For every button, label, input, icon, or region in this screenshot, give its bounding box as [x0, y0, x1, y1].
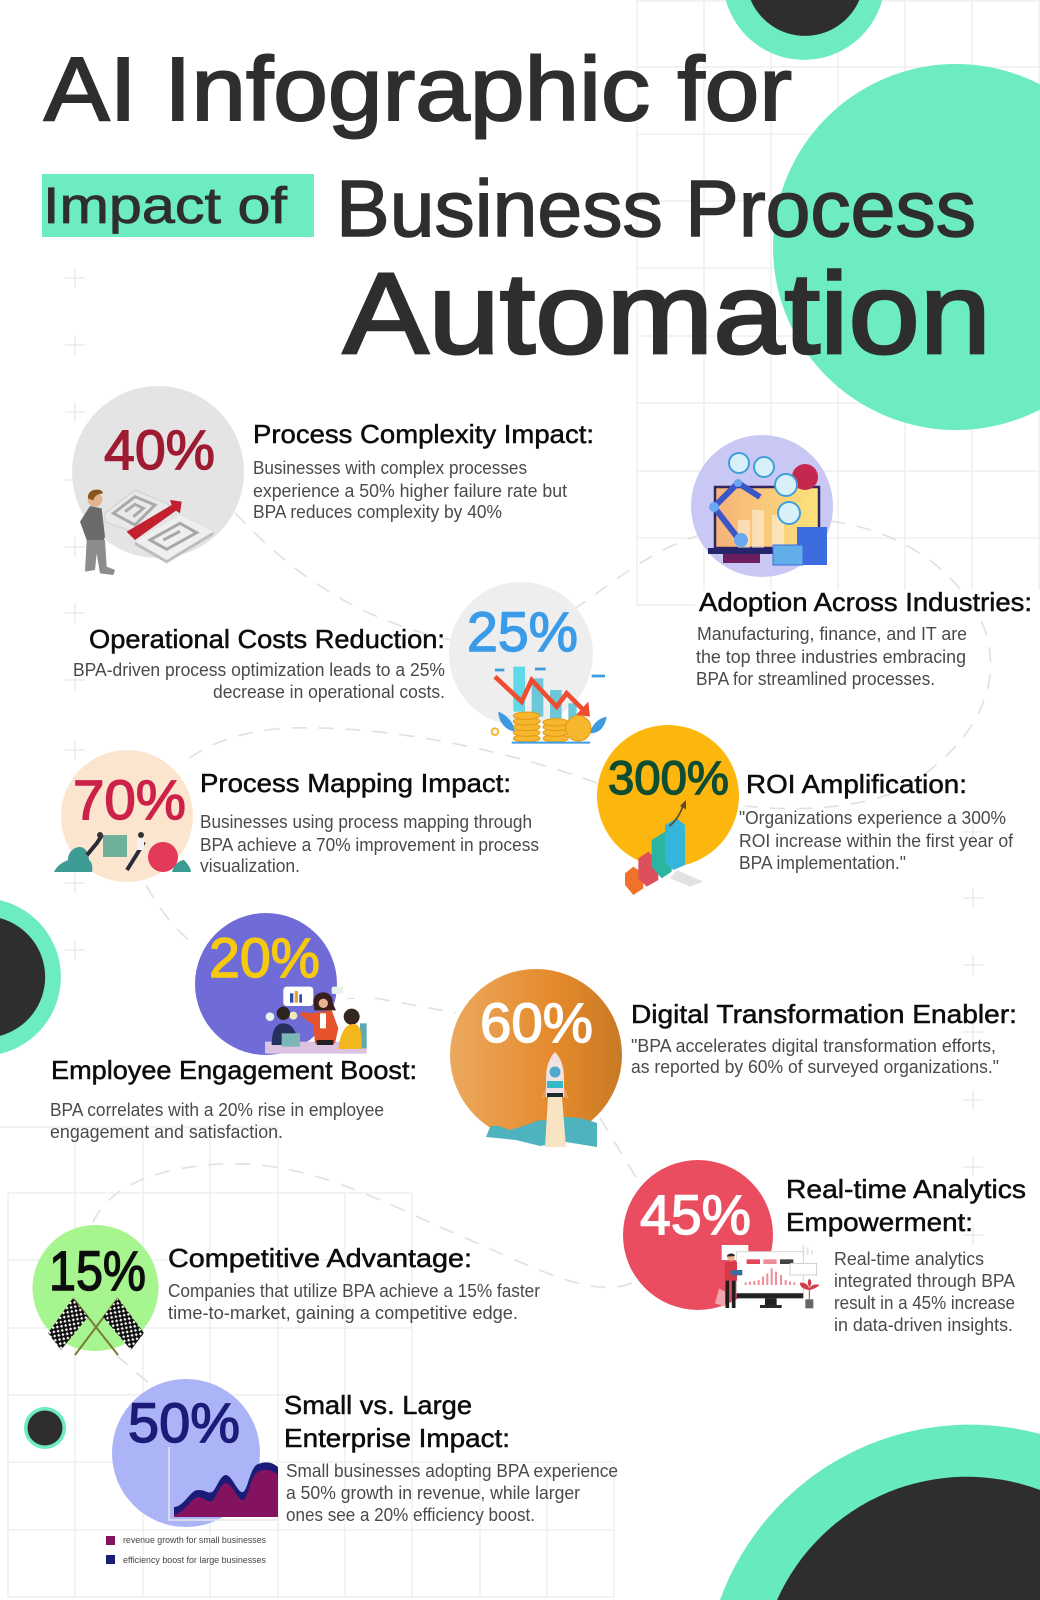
- body text: BPA correlates with a 20% rise in employee: [50, 1100, 384, 1120]
- body text: [631, 1036, 999, 1077]
- legend: revenue growth for small businesses: [123, 1535, 266, 1546]
- icon: crossed checkered flags: [48, 1298, 144, 1355]
- body text: [253, 458, 567, 522]
- body text: BPA achieve a 70% improvement in process: [200, 835, 539, 855]
- stat value 20%: 20%: [209, 926, 320, 989]
- heading: [786, 1174, 1026, 1237]
- body text: "BPA accelerates digital transformation efforts,: [631, 1036, 996, 1056]
- heading: Process Mapping Impact:: [200, 768, 511, 798]
- icon: falling cost chart with coins: [492, 667, 607, 743]
- panel: operational costs 25%: [73, 582, 607, 743]
- body text: engagement and satisfaction.: [50, 1122, 283, 1142]
- panel: adoption across industries: [691, 435, 1032, 689]
- body text: [73, 660, 445, 702]
- body text: BPA-driven process optimization leads to a 25%: [73, 660, 445, 680]
- title line: AI Infographic for: AI Infographic for: [44, 40, 792, 140]
- panel: competitive advantage 15%: [32, 1225, 540, 1355]
- legend: efficiency boost for large businesses: [123, 1555, 266, 1566]
- body text: ones see a 20% efficiency boost.: [286, 1505, 535, 1525]
- body text: [286, 1461, 618, 1525]
- highlight: Impact of: Impact of: [43, 177, 288, 234]
- icon: man looking at maze: [80, 490, 213, 575]
- panel: digital transformation 60%: [450, 969, 1017, 1147]
- body text: Businesses with complex processes: [253, 458, 527, 478]
- stat circle 15%: [32, 1225, 158, 1351]
- body text: integrated through BPA: [834, 1271, 1015, 1291]
- heading: Enterprise Impact:: [284, 1423, 510, 1453]
- stat value 45%: 45%: [640, 1183, 751, 1246]
- connector: dashed path: [92, 513, 991, 1386]
- body text: Businesses using process mapping through: [200, 812, 532, 832]
- heading: Digital Transformation Enabler:: [631, 999, 1017, 1029]
- decoration: large teal circle: [773, 64, 1040, 430]
- decoration: left teal and dark circle: [0, 900, 61, 1054]
- heading: Competitive Advantage:: [168, 1243, 472, 1273]
- legend: [106, 1535, 266, 1566]
- stat circle 70%: [61, 750, 193, 882]
- body text: [834, 1249, 1015, 1335]
- stat circle 25%: [449, 582, 593, 726]
- stat circle 40%: [72, 386, 244, 558]
- body text: the top three industries embracing: [696, 647, 966, 667]
- stat value 50%: 50%: [128, 1391, 240, 1454]
- heading: Real-time Analytics: [786, 1174, 1026, 1204]
- panel: real-time analytics 45%: [623, 1160, 1026, 1335]
- stat value 300%: 300%: [608, 751, 729, 804]
- decoration: bottom-right teal and dark circle: [720, 1425, 1040, 1600]
- title line: Business Process: Business Process: [336, 164, 976, 253]
- decoration: small teal and dark circle: [24, 1407, 66, 1449]
- heading: Adoption Across Industries:: [699, 587, 1032, 617]
- body text: [739, 808, 1014, 873]
- icon: team meeting: [265, 987, 367, 1054]
- title line: Automation: Automation: [343, 250, 991, 378]
- body text: a 50% growth in revenue, while larger: [286, 1483, 580, 1503]
- icon: rocket launch: [486, 1052, 597, 1147]
- stat value 70%: 70%: [73, 768, 186, 831]
- body text: decrease in operational costs.: [213, 682, 445, 702]
- icon: analyst at monitor: [715, 1245, 819, 1308]
- icon: team meeting: .....: [347, 995, 355, 1001]
- stat circle 60%: [450, 969, 622, 1141]
- body text: [200, 812, 539, 876]
- stat circle 300%: [597, 725, 739, 867]
- heading: Empowerment:: [786, 1207, 973, 1237]
- stat value 40%: 40%: [104, 418, 215, 481]
- icon: rising stairs: [625, 800, 703, 895]
- stat value 25%: 25%: [467, 600, 578, 663]
- highlight: Impact of: [42, 174, 314, 237]
- stat circle 20%: [195, 913, 337, 1055]
- icon: robot arm and monitor: [708, 453, 827, 565]
- panel: ROI 300%: [597, 725, 1014, 895]
- body text: [50, 1100, 384, 1142]
- body text: in data-driven insights.: [834, 1315, 1013, 1335]
- body text: BPA reduces complexity by 40%: [253, 502, 502, 522]
- stat circle 45%: [623, 1160, 773, 1310]
- body text: time-to-market, gaining a competitive edge.: [168, 1303, 518, 1323]
- heading: Operational Costs Reduction:: [89, 624, 445, 654]
- stat value 15%: 15%: [49, 1239, 146, 1302]
- icon: people pushing box and ball: [54, 832, 191, 872]
- body text: "Organizations experience a 300%: [739, 808, 1006, 828]
- stat value 60%: 60%: [480, 991, 593, 1054]
- heading: Process Complexity Impact:: [253, 419, 594, 449]
- body text: Companies that utilize BPA achieve a 15% faster: [168, 1281, 540, 1301]
- body text: BPA for streamlined processes.: [696, 669, 935, 689]
- panel: employee engagement 20%: [50, 913, 417, 1142]
- heading: ROI Amplification:: [746, 769, 967, 799]
- heading: [284, 1390, 510, 1453]
- panel: process mapping 70%: [54, 750, 539, 882]
- area chart: [169, 1447, 278, 1520]
- stat circle 50%: [112, 1379, 260, 1527]
- body text: Manufacturing, finance, and IT are: [697, 624, 967, 644]
- body text: [168, 1281, 540, 1323]
- body text: result in a 45% increase: [834, 1293, 1015, 1313]
- body text: Small businesses adopting BPA experience: [286, 1461, 618, 1481]
- body text: experience a 50% higher failure rate but: [253, 481, 567, 501]
- body text: [696, 624, 967, 689]
- heading: Employee Engagement Boost:: [51, 1055, 417, 1085]
- stat circle: adoption: [691, 435, 833, 577]
- body text: BPA implementation.": [739, 853, 906, 873]
- body text: visualization.: [200, 856, 300, 876]
- heading: Small vs. Large: [284, 1390, 472, 1420]
- panel: small vs large enterprise 50%: [106, 1379, 618, 1566]
- title: [42, 40, 991, 378]
- panel: process complexity 40%: [72, 386, 594, 575]
- body text: ROI increase within the first year of: [739, 831, 1014, 851]
- decoration: top teal and dark circle: [726, 0, 882, 60]
- body text: as reported by 60% of surveyed organizations.": [631, 1057, 999, 1077]
- body text: Real-time analytics: [834, 1249, 984, 1269]
